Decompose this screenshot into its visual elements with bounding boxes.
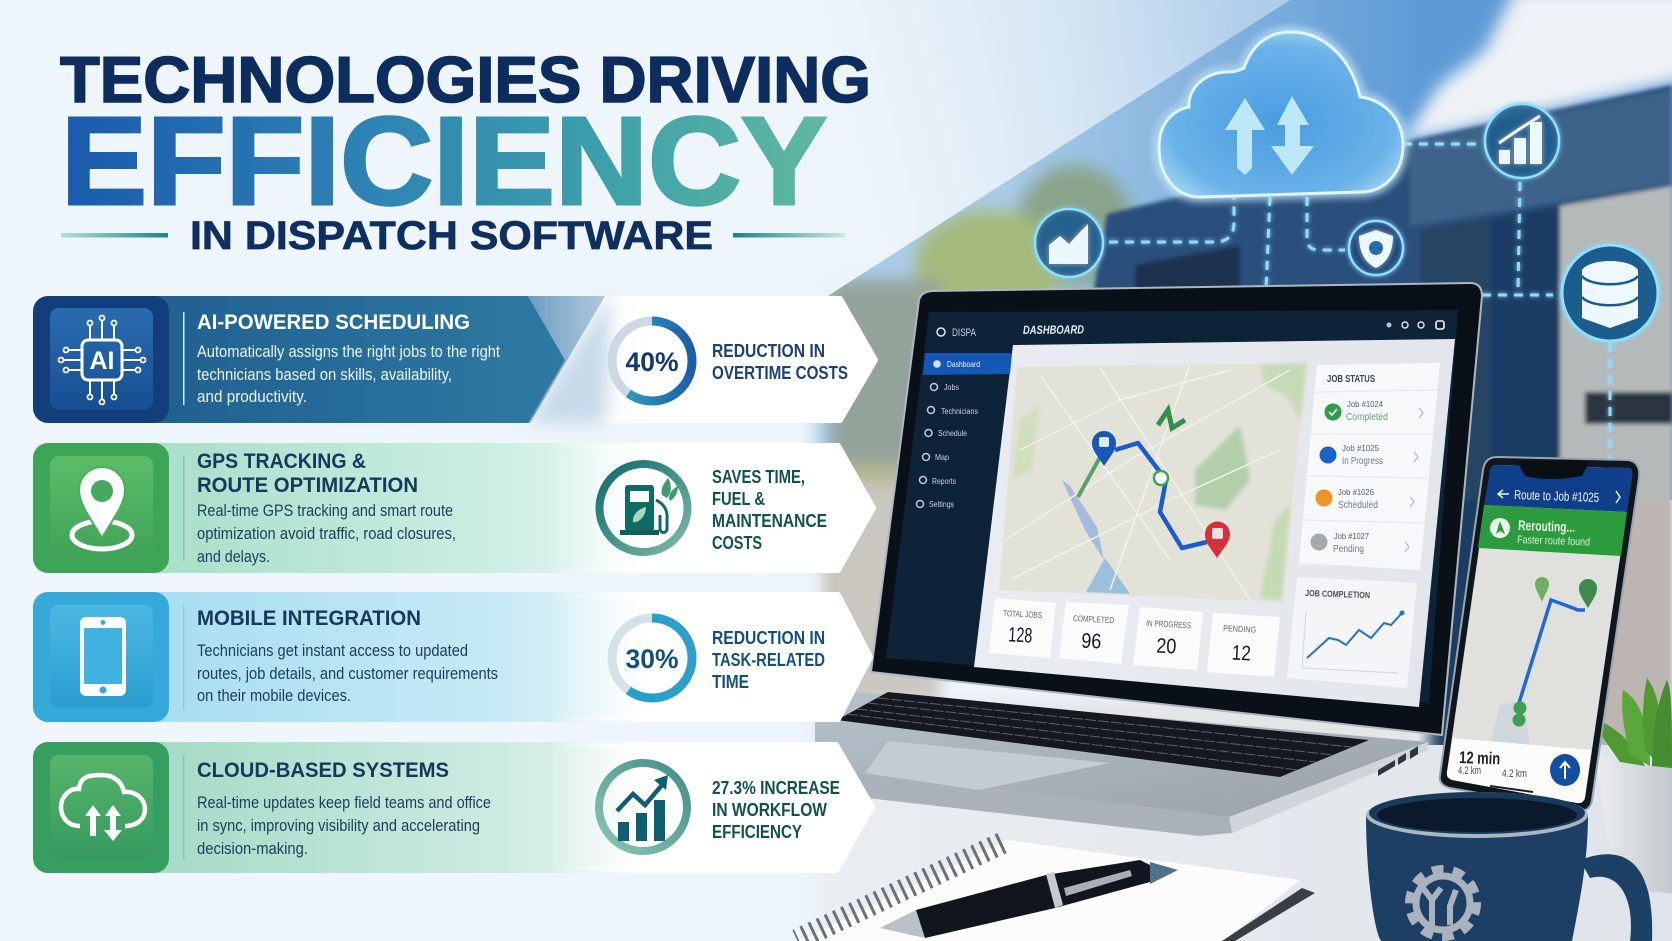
stat card: total jobs: TOTAL JOBS [1003,608,1043,620]
sidebar navigation: Settings [929,500,954,509]
title: TECHNOLOGIES DRIVING [60,43,871,116]
phone trip summary: 4.2 km [1458,765,1481,777]
stat card: total jobs [989,598,1056,658]
laptop lid [871,283,1482,735]
job status card: Scheduled [1338,500,1378,511]
title: IN DISPATCH SOFTWARE [190,214,713,258]
dashboard header: DASHBOARD [1023,322,1084,337]
panel: AI-powered scheduling: OVERTIME COSTS [712,362,848,383]
coffee mug [1366,792,1652,941]
panel: mobile integration: routes, job details, and customer requirements [197,665,498,683]
panel: GPS tracking and route optimization: FUEL & [712,488,765,509]
donut: 40%: 40% [626,347,678,377]
panel: mobile integration: REDUCTION IN [712,627,825,648]
panel: cloud-based systems: in sync, improving visibility and accelerating [197,817,480,835]
icon: glowing cloud [1159,32,1403,197]
phone trip summary: 4.2 km [1502,768,1527,780]
panel: GPS tracking and route optimization: and delays. [197,548,270,566]
smartphone: Route to Job #1025 [1514,487,1599,505]
dashboard sidebar [886,310,1458,703]
rerouting banner: Faster route found [1517,534,1590,549]
panel: AI-powered scheduling: technicians based on skills, availability, [197,366,452,384]
icon: red map pin [1205,521,1230,558]
panel: AI-powered scheduling [33,296,875,423]
phone route [1490,577,1597,750]
stat card: completed [1059,602,1129,664]
phone map screen [1447,465,1632,803]
panel: mobile integration: Technicians get instant access to updated [197,642,468,660]
sidebar navigation: Technicians [941,407,978,416]
panel: GPS tracking and route optimization: ROUTE OPTIMIZATION [197,474,418,497]
panel: cloud-based systems: IN WORKFLOW [712,799,827,820]
dashboard header [937,321,1444,339]
stat card: pending: 12 [1231,642,1251,665]
panel: GPS tracking and route optimization: Real-time GPS tracking and smart route [197,502,453,520]
plant [1587,678,1672,893]
sidebar navigation: Schedule [938,429,967,438]
panel: cloud-based systems: CLOUD-BASED SYSTEMS [197,759,449,782]
stat card: completed: 96 [1081,630,1102,654]
panel: GPS tracking and route optimization: COSTS [712,532,762,553]
stat card: in progress [1133,607,1203,670]
sidebar navigation: Dashboard [947,360,980,369]
dashboard main area [974,339,1455,707]
job status card: Job #1025 [1342,444,1380,453]
dashboard map [999,363,1307,602]
icon: blue map pin [1092,431,1116,466]
job status card: Completed [1346,412,1388,423]
icon: gear logo [1411,871,1475,935]
job status card: Job #1027 [1334,532,1370,541]
laptop [815,283,1482,836]
donut: 40% [612,321,692,401]
job status card: Job #1026 [1338,488,1375,497]
photo background: warehouse and sky [800,0,1672,941]
icon: chart circle node [1485,104,1559,178]
icon: fuel pump ring [600,464,688,552]
sidebar navigation [916,353,1012,509]
dashboard header: DISPA [952,327,976,339]
panel: mobile integration: TIME [712,671,749,692]
panel: mobile integration: TASK-RELATED [712,649,825,670]
panel: cloud-based systems: EFFICIENCY [712,821,803,842]
title [60,43,871,258]
panel: cloud-based systems [33,742,872,873]
icon: AI chip: AI [90,347,114,375]
panel: AI-powered scheduling: and productivity. [197,388,307,406]
job status card: Pending [1333,544,1364,555]
panel: mobile integration [33,592,870,722]
icon: growth circle node [1035,209,1103,277]
donut: 30%: 30% [626,644,678,674]
donut: 30% [612,618,692,698]
stat card: in progress: IN PROGRESS [1146,618,1192,630]
connector lines [1109,144,1610,460]
panel: GPS tracking and route optimization: optimization avoid traffic, road closures, [197,525,456,543]
icon: smartphone [50,605,153,708]
sidebar navigation: Reports [932,477,956,486]
panel: GPS tracking and route optimization [33,443,873,573]
panel: AI-powered scheduling: Automatically assigns the right jobs to the right [197,343,500,361]
panel: mobile integration: MOBILE INTEGRATION [197,607,421,630]
panel: AI-powered scheduling: AI-POWERED SCHEDULING [197,311,470,334]
panel: cloud-based systems: 27.3% INCREASE [712,777,840,798]
sidebar navigation: Jobs [944,383,959,392]
panel: GPS tracking and route optimization: MAINTENANCE [712,510,827,531]
panel: cloud-based systems: decision-making. [197,840,308,858]
icon: AI chip [50,308,153,410]
smartphone [1440,457,1639,811]
title: EFFICIENCY [61,92,827,231]
icon: location pin [50,456,153,559]
panel: AI-powered scheduling: REDUCTION IN [712,340,825,361]
phone trip summary [1447,738,1591,803]
panel: GPS tracking and route optimization: SAVES TIME, [712,466,805,487]
white fade overlay left of diagonal [0,0,1290,941]
panel: cloud-based systems: Real-time updates keep field teams and office [197,794,491,812]
sidebar navigation: Map [935,453,949,462]
stat card: total jobs: 128 [1008,623,1033,648]
stat card: pending [1207,613,1280,677]
job status card: In Progress [1342,456,1383,467]
phone trip summary: 12 min [1459,748,1500,768]
panel: GPS tracking and route optimization: GPS TRACKING & [197,450,366,473]
stat card: in progress: 20 [1156,635,1177,659]
icon: growth chart ring [599,763,687,851]
job status card [1299,363,1440,570]
laptop base [815,688,1428,836]
notebook and pen [797,840,1315,941]
icon: cloud sync [50,755,153,858]
job status card: JOB STATUS [1327,374,1375,385]
job status card: Job #1024 [1347,400,1384,409]
stat card: completed: COMPLETED [1073,613,1114,625]
panel: mobile integration: on their mobile devices. [197,687,351,705]
stat card: pending: PENDING [1223,623,1256,635]
job completion chart: JOB COMPLETION [1305,588,1370,600]
icon: shield circle node [1349,221,1403,275]
rerouting banner: Rerouting... [1518,517,1575,535]
rerouting banner [1490,517,1590,549]
job completion chart [1287,577,1417,688]
icon: database circle node [1562,245,1658,341]
